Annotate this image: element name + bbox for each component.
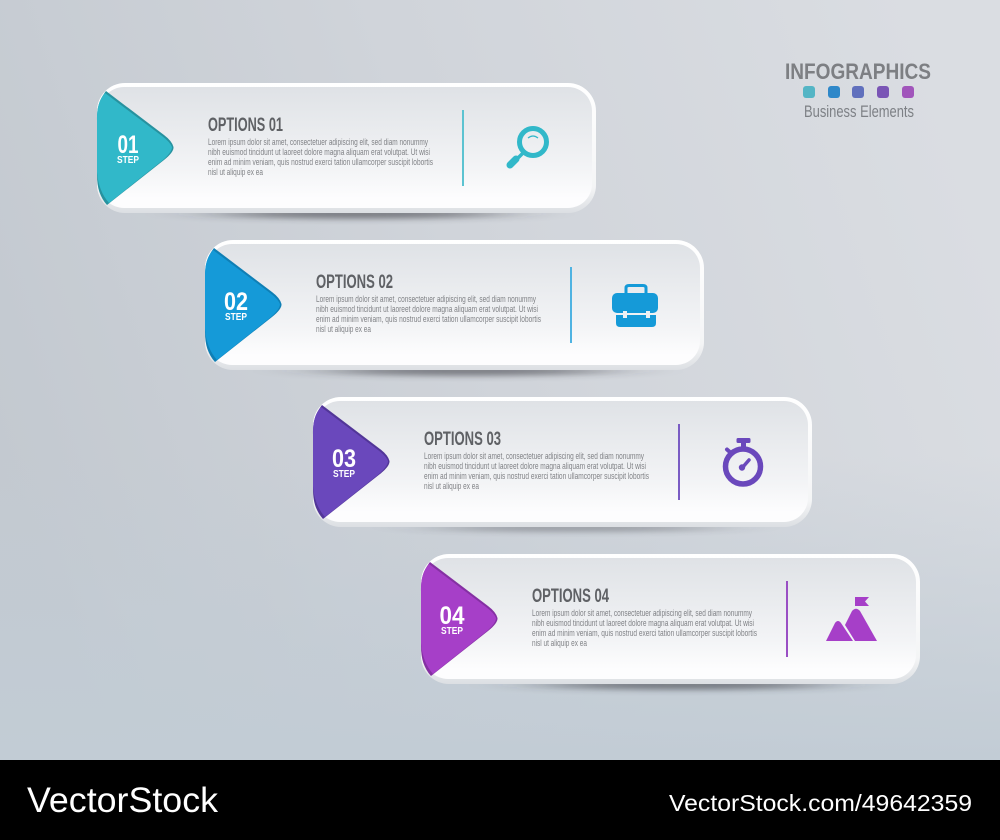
- option text: nisl ut aliquip ex ea: [316, 324, 371, 334]
- option text: enim ad minim veniam, quis nostrud exerci tation ullamcorper suscipit lobortis: [532, 628, 757, 638]
- option text: [532, 586, 757, 648]
- panel: step 02: [205, 240, 704, 376]
- option text: [316, 272, 541, 334]
- option text: nisl ut aliquip ex ea: [532, 638, 587, 648]
- step label: STEP: [117, 154, 139, 166]
- heading: INFOGRAPHICS: [785, 59, 931, 84]
- icon: magnifier: [510, 128, 546, 165]
- option text: [208, 115, 433, 177]
- panel: step 01: [97, 83, 596, 219]
- colour dots: [803, 86, 914, 98]
- footer bar: [0, 760, 1000, 840]
- icon: briefcase: [612, 286, 658, 327]
- triangle badge 03: [313, 405, 390, 519]
- step label: STEP: [225, 311, 247, 323]
- panel: step 03: [313, 397, 812, 532]
- option text: Lorem ipsum dolor sit amet, consectetuer adipiscing elit, sed diam nonummy: [532, 608, 752, 618]
- icon: stopwatch: [726, 438, 760, 484]
- option text: OPTIONS 03: [424, 429, 501, 450]
- option text: Lorem ipsum dolor sit amet, consectetuer adipiscing elit, sed diam nonummy: [208, 137, 428, 147]
- icon: mountain with flag: [826, 597, 877, 641]
- step label: STEP: [333, 468, 355, 480]
- option text: OPTIONS 01: [208, 115, 283, 136]
- option text: enim ad minim veniam, quis nostrud exerci tation ullamcorper suscipit lobortis: [316, 314, 541, 324]
- step label: STEP: [441, 625, 463, 637]
- option text: nisl ut aliquip ex ea: [424, 481, 479, 491]
- step number: 01: [118, 131, 139, 159]
- step number: 04: [440, 602, 465, 630]
- option text: nibh euismod tincidunt ut laoreet dolore magna aliquam erat volutpat. Ut wisi: [424, 461, 646, 471]
- option text: nibh euismod tincidunt ut laoreet dolore magna aliquam erat volutpat. Ut wisi: [208, 147, 430, 157]
- option text: nibh euismod tincidunt ut laoreet dolore magna aliquam erat volutpat. Ut wisi: [316, 304, 538, 314]
- brand name: VectorStock: [27, 781, 219, 820]
- triangle badge 02: [205, 248, 282, 362]
- triangle badge 04: [421, 562, 498, 676]
- step number: 03: [332, 445, 356, 473]
- option text: [424, 429, 649, 491]
- option text: OPTIONS 02: [316, 272, 393, 293]
- option text: nibh euismod tincidunt ut laoreet dolore magna aliquam erat volutpat. Ut wisi: [532, 618, 754, 628]
- step number: 02: [224, 288, 248, 316]
- header: infographics title: [785, 59, 931, 121]
- option text: OPTIONS 04: [532, 586, 609, 607]
- image reference: VectorStock.com/49642359: [669, 790, 972, 816]
- triangle badge 01: [97, 91, 174, 205]
- option text: nisl ut aliquip ex ea: [208, 167, 263, 177]
- option text: enim ad minim veniam, quis nostrud exerci tation ullamcorper suscipit lobortis: [424, 471, 649, 481]
- option text: Lorem ipsum dolor sit amet, consectetuer adipiscing elit, sed diam nonummy: [316, 294, 536, 304]
- panel: step 04: [421, 554, 920, 690]
- subheading: Business Elements: [804, 103, 914, 121]
- option text: enim ad minim veniam, quis nostrud exerci tation ullamcorper suscipit lobortis: [208, 157, 433, 167]
- option text: Lorem ipsum dolor sit amet, consectetuer adipiscing elit, sed diam nonummy: [424, 451, 644, 461]
